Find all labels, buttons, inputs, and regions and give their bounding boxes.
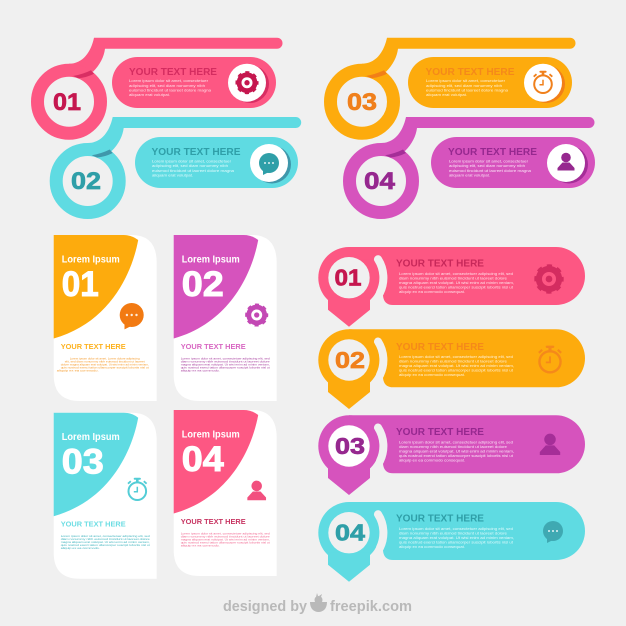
body text 01: adipiscing elit, sed diam nonummy nibh — [129, 83, 205, 88]
number: 02 — [335, 347, 365, 373]
card heading: YOUR TEXT HERE — [61, 520, 126, 529]
card number: 02 — [182, 265, 224, 304]
body text: diam nonummy nibh euismod tincidunt ut laoreet dolore — [399, 444, 507, 449]
panel: pin banner 01 — [318, 247, 585, 327]
heading 03: YOUR TEXT HERE — [426, 67, 515, 78]
card body text: quis nostrud exerci tation ullamcorper suscipit lobortis nisl ut — [61, 366, 149, 370]
body text 02: Lorem ipsum dolor sit amet, consectetuer — [152, 158, 232, 164]
crescent notch — [378, 259, 383, 293]
crescent notch — [378, 428, 383, 461]
body text 03: adipiscing elit, sed diam nonummy nibh — [426, 83, 502, 88]
crescent notch — [378, 514, 383, 548]
pin and bar shape — [318, 502, 585, 582]
card heading: YOUR TEXT HERE — [181, 517, 246, 526]
card label: Lorem Ipsum — [182, 430, 240, 440]
number 01: 01 — [53, 89, 81, 116]
body text 03: euismod tincidunt ut laoreet dolore magna — [426, 88, 509, 92]
card body text: magna aliquam erat volutpat. Ut wisi enim ad minim veniam, — [61, 540, 150, 544]
body text: Lorem ipsum dolor sit amet, consectetuer adipiscing elit, sed — [399, 440, 513, 444]
body text 02: adipiscing elit, sed diam nonummy nibh — [152, 163, 228, 168]
ring connector bar 01 — [38, 38, 282, 133]
icon: freepik logo — [310, 593, 327, 612]
body text 04: Lorem ipsum dolor sit amet, consectetuer — [449, 158, 529, 164]
number: 04 — [335, 520, 365, 546]
panel: card 03 — [54, 413, 157, 579]
ring connector bar 04 — [350, 117, 594, 212]
body text: quis nostrud exerci tation ullamcorper suscipit lobortis nisl ut — [399, 368, 514, 372]
card body text: diam nonummy nibh euismod tincidunt ut laoreet dolore — [181, 360, 270, 364]
card body text: Lorem ipsum dolor sit amet, Lorem dolore adipiscing — [70, 356, 140, 360]
icon: chat — [543, 521, 563, 543]
card label: Lorem Ipsum — [62, 254, 120, 266]
icon: stopwatch in white circle — [524, 64, 565, 103]
panel: ring banner 01 — [38, 38, 282, 133]
body text 03 — [426, 78, 509, 97]
card body text: quis nostrud exerci tation ullamcorper suscipit lobortis nisl ut — [181, 366, 270, 370]
body text 04 — [449, 158, 532, 178]
body text: aliquip ex ea commodo consequat. — [399, 544, 465, 549]
footer: freepik credit — [223, 593, 412, 615]
panel: pin banner 03 — [318, 415, 585, 495]
pin and bar shape — [318, 247, 585, 327]
icon: gear in white circle — [228, 64, 269, 103]
card body text: aliquip ex ea commodo. — [57, 368, 99, 372]
number: 03 — [335, 433, 365, 459]
body text: quis nostrud exerci tation ullamcorper suscipit lobortis nisl ut — [399, 540, 514, 545]
card background — [54, 235, 157, 401]
card colour corner — [54, 413, 138, 516]
panel: card 01 — [54, 235, 157, 401]
card body text: magna aliquam erat volutpat. Ut wisi enim ad minim veniam, — [181, 362, 270, 366]
icon: gear — [247, 305, 266, 325]
card body text: Lorem ipsum dolor sit amet, consectetuer adipiscing elit, sed — [181, 532, 270, 536]
heading 04: YOUR TEXT HERE — [448, 147, 537, 158]
card body text: aliquip ex ea commodo. — [181, 544, 220, 548]
card colour corner — [54, 235, 138, 338]
number 03: 03 — [347, 89, 377, 116]
body text 04: euismod tincidunt ut laoreet dolore magna — [449, 168, 532, 173]
pill 02 — [135, 137, 298, 188]
body text: Lorem ipsum dolor sit amet, consectetuer adipiscing elit, sed — [399, 271, 513, 276]
body text: diam nonummy nibh euismod tincidunt ut laoreet dolore — [399, 276, 507, 281]
pin and bar shape — [318, 329, 585, 409]
body text — [399, 354, 514, 377]
body text 01: euismod tincidunt ut laoreet dolore magna — [129, 88, 212, 92]
number: 01 — [334, 265, 362, 291]
card body text — [61, 534, 150, 550]
heading 01: YOUR TEXT HERE — [129, 67, 217, 78]
body text 02: euismod tincidunt ut laoreet dolore magna — [152, 168, 235, 173]
card number: 04 — [182, 440, 224, 479]
panel: pin banner 02 — [318, 329, 585, 409]
body text: magna aliquam erat volutpat. Ut wisi enim ad minim veniam, — [399, 535, 514, 540]
card body text: elit, sed diam nonummy nibh euismod tincidunt ut laoreet — [65, 360, 145, 364]
card body text: aliquip ex ea commodo. — [181, 368, 220, 372]
card number: 01 — [62, 265, 99, 304]
body text: magna aliquam erat volutpat. Ut wisi enim ad minim veniam, — [399, 280, 514, 285]
body text 01 — [129, 78, 212, 97]
pill 01 — [112, 57, 276, 108]
body text: magna aliquam erat volutpat. Ut wisi enim ad minim veniam, — [399, 363, 514, 368]
body text 04: aliquam erat volutpat. — [449, 172, 490, 178]
number 02: 02 — [71, 168, 101, 195]
card body text — [57, 356, 149, 372]
icon: person — [540, 434, 560, 455]
icon: stopwatch — [539, 346, 561, 372]
heading: YOUR TEXT HERE — [396, 427, 484, 438]
body text 04: adipiscing elit, sed diam nonummy nibh — [449, 163, 525, 168]
card body text — [181, 356, 270, 372]
card heading: YOUR TEXT HERE — [181, 342, 246, 351]
body text: quis nostrud exerci tation ullamcorper suscipit lobortis nisl ut — [399, 285, 514, 290]
pin and bar shape — [318, 415, 585, 495]
panel: card 02 — [174, 235, 277, 401]
icon: gear — [537, 267, 561, 291]
body text — [399, 440, 514, 462]
body text — [399, 271, 514, 294]
icon: person in white circle — [547, 144, 588, 184]
ring connector bar 03 — [330, 38, 576, 133]
heading: YOUR TEXT HERE — [396, 259, 484, 270]
card background — [174, 410, 277, 576]
heading: YOUR TEXT HERE — [396, 342, 484, 353]
card body text: quis nostrud exerci tation ullamcorper suscipit lobortis nisl ut — [181, 540, 270, 544]
card body text: diam nonummy nibh euismod tincidunt ut laoreet dolore — [181, 534, 270, 538]
body text: aliquip ex ea commodo consequat. — [399, 372, 465, 377]
card background — [54, 413, 157, 579]
body text: Lorem ipsum dolor sit amet, consectetuer adipiscing elit, sed — [399, 354, 513, 359]
body text 02 — [152, 158, 235, 178]
panel: ring banner 04 — [350, 117, 595, 212]
panel: pin banner 04 — [318, 502, 585, 582]
credit text right: freepik.com — [330, 598, 412, 615]
pill 03 — [408, 57, 572, 108]
number circle — [328, 339, 370, 381]
icon: chat — [120, 303, 144, 329]
number circle — [328, 425, 370, 467]
body text 01: aliquam erat volutpat. — [129, 92, 170, 97]
body text 03: aliquam erat volutpat. — [426, 92, 467, 97]
card colour corner — [174, 235, 258, 338]
pill 04 — [431, 137, 595, 188]
body text: aliquip ex ea commodo consequat. — [399, 458, 465, 462]
heading: YOUR TEXT HERE — [396, 514, 484, 525]
number circle — [328, 257, 370, 298]
body text: Lorem ipsum dolor sit amet, consectetuer adipiscing elit, sed — [399, 526, 513, 531]
card colour corner — [174, 410, 258, 514]
body text: aliquip ex ea commodo consequat. — [399, 289, 465, 294]
number 04: 04 — [364, 168, 396, 195]
card background — [174, 235, 277, 401]
card body text: Lorem ipsum dolor sit amet, consectetuer adipiscing elit, sed — [181, 356, 270, 360]
heading 02: YOUR TEXT HERE — [152, 147, 241, 158]
body text: magna aliquam erat volutpat. Ut wisi enim ad minim veniam, — [399, 448, 514, 454]
panel: ring banner 02 — [56, 117, 301, 212]
card label: Lorem Ipsum — [62, 432, 120, 443]
body text: diam nonummy nibh euismod tincidunt ut laoreet dolore — [399, 358, 507, 364]
body text 03: Lorem ipsum dolor sit amet, consectetuer — [426, 78, 506, 83]
body text: diam nonummy nibh euismod tincidunt ut laoreet dolore — [399, 531, 507, 536]
body text: quis nostrud exerci tation ullamcorper suscipit lobortis nisl ut — [399, 453, 514, 458]
card number: 03 — [62, 443, 104, 482]
card heading: YOUR TEXT HERE — [61, 342, 126, 351]
crescent notch — [378, 342, 383, 375]
credit text left: designed by — [223, 598, 308, 615]
card body text: Lorem ipsum dolor sit amet, consectetuer adipiscing elit, sed — [61, 534, 150, 538]
card body text: magna aliquam erat volutpat. Ut wisi enim ad minim veniam, — [181, 538, 270, 542]
card body text: aliquip ex ea commodo. — [61, 546, 100, 550]
card body text: quis nostrud exerci tation ullamcorper suscipit lobortis nisl ut — [61, 543, 150, 547]
panel: card 04 — [174, 410, 277, 576]
card body text: dolore magna aliquam erat volutpat. Ut wisi enim ad minim veniam, — [61, 362, 149, 366]
panel: ring banner 03 — [330, 38, 576, 133]
card body text — [181, 532, 270, 548]
icon: stopwatch — [128, 478, 147, 500]
number circle — [328, 512, 370, 553]
body text — [399, 526, 514, 549]
card body text: diam nonummy nibh euismod tincidunt ut laoreet dolore — [61, 537, 150, 541]
card label: Lorem Ipsum — [182, 254, 240, 266]
body text 01: Lorem ipsum dolor sit amet, consectetuer — [129, 78, 209, 83]
icon: chat in white circle — [250, 144, 291, 184]
body text 02: aliquam erat volutpat. — [152, 172, 193, 178]
ring connector bar 02 — [56, 117, 301, 212]
icon: person — [247, 481, 266, 500]
